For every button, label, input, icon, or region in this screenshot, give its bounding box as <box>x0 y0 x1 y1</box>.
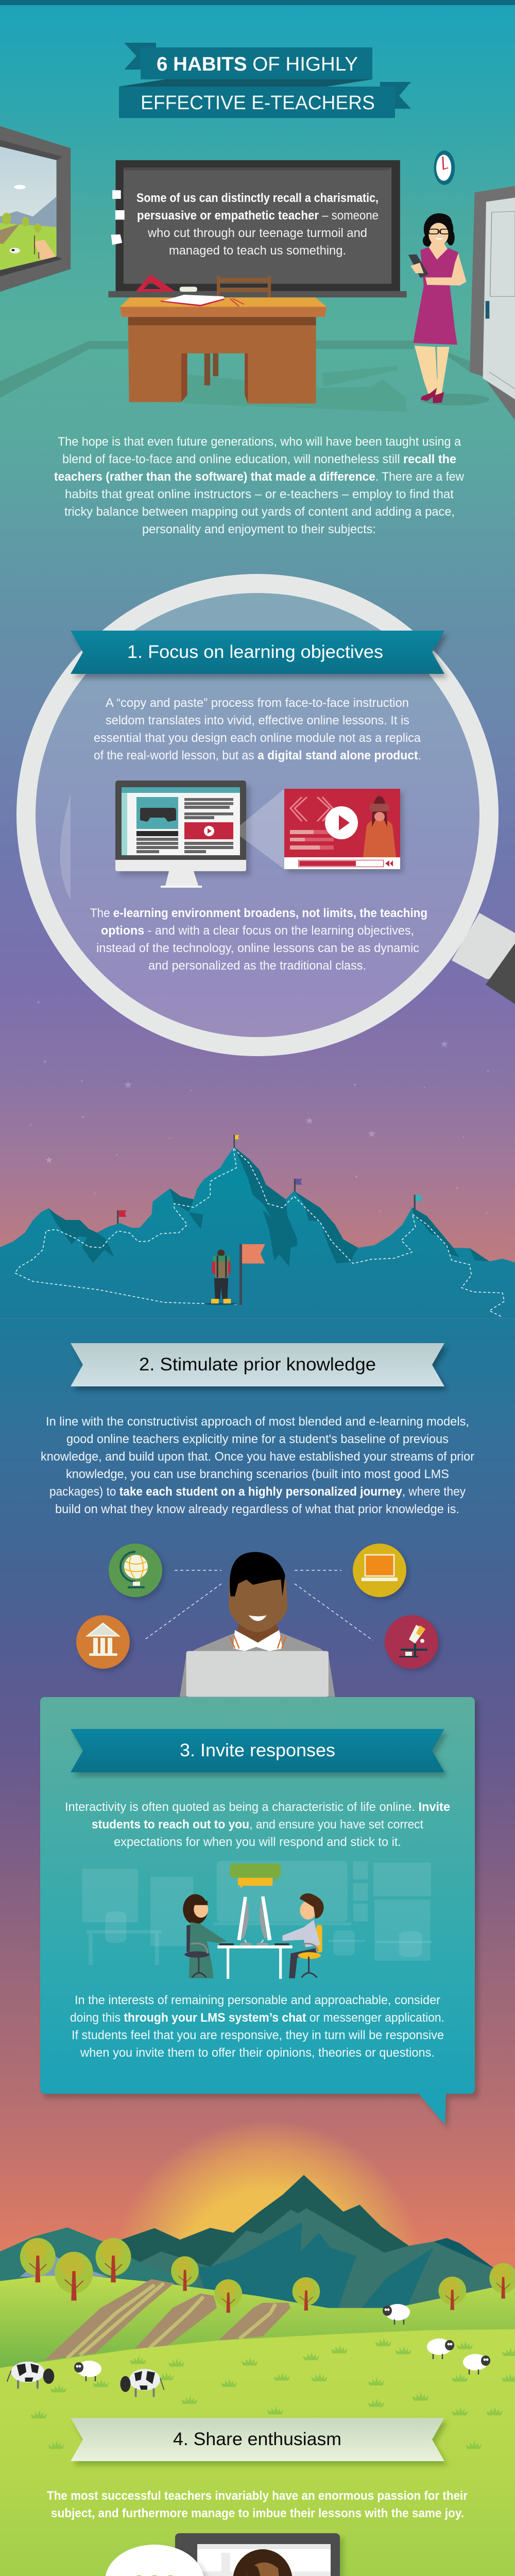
hiker <box>204 1250 237 1305</box>
blackboard <box>108 160 407 297</box>
section 3 text top: expectations for when you will respond and stick to it. <box>114 1835 401 1849</box>
title ribbon: 6 HABITS OF HIGHLY <box>157 54 358 75</box>
icon: museum <box>76 1615 132 1671</box>
section 3 text bottom <box>70 1993 444 2060</box>
sheep <box>74 2304 490 2381</box>
tablet with teacher video <box>105 2533 344 2576</box>
section 1 banner: 1. Focus on learning objectives <box>127 642 383 662</box>
chair back <box>217 276 271 297</box>
sheep, cows and grass <box>7 2304 515 2449</box>
back hill <box>0 2276 515 2378</box>
floor baseboard <box>0 341 470 398</box>
trees <box>20 2238 515 2312</box>
mountains <box>0 2175 496 2315</box>
blackboard text: Some of us can distinctly recall a charismatic, <box>136 191 379 205</box>
orange flag <box>239 1244 265 1305</box>
section 1 text bottom: instead of the technology, online lessons can be as dynamic <box>96 941 419 955</box>
mountain scene with route and flags <box>0 1001 515 1319</box>
dashed route <box>15 1148 504 1317</box>
section 1 text bottom: and personalized as the traditional class. <box>148 959 366 973</box>
section 2 banner: 2. Stimulate prior knowledge <box>139 1354 376 1375</box>
section 2 banner <box>71 1343 448 1391</box>
section 1 banner <box>71 631 448 678</box>
clock <box>434 150 455 185</box>
section 4 banner <box>71 2418 448 2465</box>
field strips <box>44 2279 290 2361</box>
intro paragraph: blend of face-to-face and online education, will nonetheless still recall the <box>62 452 456 466</box>
intro paragraph: teachers (rather than the software) that made a difference. There are a few <box>54 470 465 484</box>
section 2 text: knowledge, you can use branching scenarios (built into most good LMS <box>66 1467 449 1481</box>
cows <box>7 2362 164 2397</box>
section 1 text top: A “copy and paste” process from face-to-face instruction <box>106 696 409 710</box>
section 3 text bottom: doing this through your LMS system’s chat or messenger application. <box>70 2011 444 2025</box>
section 4 text top <box>47 2489 468 2520</box>
valley with mountains, trees and fields <box>0 2175 515 2378</box>
mountain shadows <box>48 1147 489 1267</box>
intro paragraph: personality and enjoyment to their subjects: <box>142 522 376 536</box>
section 2 text <box>41 1415 474 1516</box>
intro paragraph <box>54 435 465 536</box>
dashed links <box>144 1570 373 1640</box>
stars <box>30 1001 490 1214</box>
speech bubble <box>105 2545 207 2576</box>
woman on screen <box>230 2549 295 2576</box>
section 1 text bottom <box>90 906 427 973</box>
section 2 text: packages) to take each student on a highly personalized journey, where they <box>49 1485 466 1499</box>
student at laptop <box>180 1552 335 1697</box>
section 3 text bottom: In the interests of remaining personable and approachable, consider <box>75 1993 440 2007</box>
panel body <box>40 1697 475 2125</box>
section 4 banner: 4. Share enthusiasm <box>173 2429 341 2449</box>
blackboard text <box>136 191 379 258</box>
desk and monitors <box>217 1896 293 1979</box>
teacher's desk <box>120 295 327 403</box>
section 3 text top: students to reach out to you, and ensure you have set correct <box>92 1818 423 1832</box>
section 2 text: In line with the constructivist approach of most blended and e-learning models, <box>46 1415 469 1429</box>
desktop monitor with e-learning page <box>115 781 250 888</box>
blackboard text: who cut through our teenage turmoil and <box>147 226 367 240</box>
section 1 text top <box>94 696 421 762</box>
section 1 text top: of the real-world lesson, but as a digital stand alone product. <box>94 749 421 762</box>
knowledge icons with dashed links <box>76 1544 441 1697</box>
speech bubbles <box>230 1863 281 1889</box>
title ribbon <box>119 43 411 118</box>
faint office background <box>82 1861 432 1965</box>
intro paragraph: habits that great online instructors – or e-teachers – employ to find that <box>65 487 454 501</box>
section 1 text bottom: The e-learning environment broadens, not limits, the teaching <box>90 906 427 920</box>
classroom illustration <box>0 126 515 420</box>
icon: laptop <box>353 1544 409 1600</box>
section 2 text: knowledge, and build upon that. Once you have established your streams of prior <box>41 1450 474 1464</box>
section 3 speech-bubble panel <box>40 1697 478 2129</box>
panel shadow <box>44 1701 478 2129</box>
window <box>0 126 71 292</box>
section 2 text: good online teachers explicitly mine for a student's baseline of previous <box>66 1432 449 1446</box>
magnifying glass <box>26 583 515 1047</box>
section 2 text: build on what they know already regardless of what that prior knowledge is. <box>55 1502 459 1516</box>
video player zoom <box>240 789 403 873</box>
sun glow <box>111 2120 425 2434</box>
door <box>470 186 515 420</box>
section 3 banner: 3. Invite responses <box>180 1740 335 1760</box>
section 1 text bottom: options - and with a clear focus on the learning objectives, <box>101 924 414 938</box>
section 3 text bottom: when you invite them to offer their opinions, theories or questions. <box>80 2046 435 2060</box>
blackboard text: managed to teach us something. <box>169 244 346 258</box>
section 4 text top: The most successful teachers invariably have an enormous passion for their <box>47 2489 468 2503</box>
front meadow hill <box>0 2329 515 2421</box>
section 3 text top <box>65 1800 450 1849</box>
title ribbon: EFFECTIVE E-TEACHERS <box>141 92 375 114</box>
section 1 text top: essential that you design each online module not as a replica <box>94 731 421 745</box>
icon: microscope <box>385 1615 441 1671</box>
icon: globe <box>109 1544 165 1600</box>
section 3 text top: Interactivity is often quoted as being a characteristic of life online. Invite <box>65 1800 450 1814</box>
grass tufts <box>30 2338 515 2449</box>
intro paragraph: The hope is that even future generations, who will have been taught using a <box>58 435 461 449</box>
mountains <box>0 1147 515 1319</box>
two students at computers in office <box>82 1861 432 1979</box>
flag poles on peaks <box>117 1134 422 1230</box>
section 1 text top: seldom translates into vivid, effective online lessons. It is <box>106 714 409 727</box>
man student <box>283 1893 324 1978</box>
section 3 banner <box>71 1729 448 1776</box>
intro paragraph: tricky balance between mapping out yards of content and adding a pace, <box>64 505 455 519</box>
teacher figure <box>408 213 489 405</box>
woman student <box>183 1894 227 1978</box>
section 3 text bottom: If students feel that you are responsive, they in turn will be responsive <box>72 2028 444 2042</box>
blackboard text: persuasive or empathetic teacher – someone <box>137 209 379 223</box>
section 4 text top: subject, and furthermore manage to imbue their lessons with the same joy. <box>51 2506 464 2520</box>
floor shadows <box>184 366 407 412</box>
